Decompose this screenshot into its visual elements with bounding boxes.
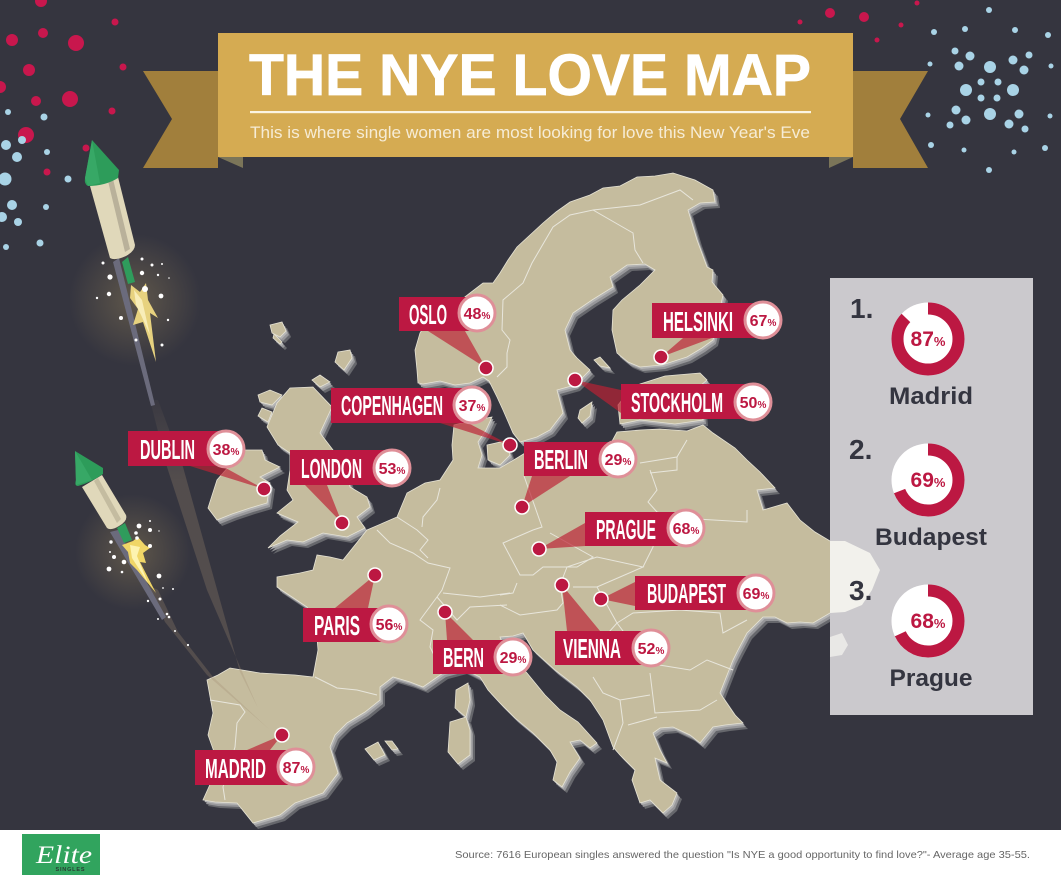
label: Oslo: OSLO	[409, 299, 447, 330]
label: Copenhagen: COPENHAGEN	[341, 390, 443, 421]
rank 2: Budapest: 2.	[849, 434, 872, 465]
label: Bern: BERN	[443, 642, 484, 673]
label: Copenhagen: 37%	[459, 398, 485, 415]
source note: Source: 7616 European singles answered the question "Is NYE a good opportunity to find love?"- Average age 35-55.	[455, 849, 1030, 861]
label: Prague: PRAGUE	[596, 514, 656, 545]
label: Paris: 56%	[376, 617, 402, 634]
rank 1: Madrid: 1.	[850, 293, 873, 324]
label: Vienna: 52%	[638, 641, 664, 658]
label: Madrid: MADRID	[205, 753, 266, 784]
label: Berlin: 29%	[605, 452, 631, 469]
label: Budapest	[635, 575, 774, 611]
country borders	[210, 190, 747, 800]
label: Madrid: 87%	[283, 760, 309, 777]
label: Bern: 29%	[500, 650, 526, 667]
label: London: LONDON	[301, 453, 362, 484]
label: Helsinki: HELSINKI	[663, 306, 733, 337]
rank 1: Madrid	[850, 293, 973, 410]
title: THE NYE LOVE MAP	[249, 43, 811, 108]
rank 1: Madrid: Madrid	[889, 383, 973, 410]
banner right ribbon tail	[853, 71, 928, 168]
label: Budapest: BUDAPEST	[647, 578, 726, 609]
label: Stockholm	[621, 384, 771, 420]
rank 2: Budapest: Budapest	[875, 524, 987, 551]
map of Europe	[203, 173, 885, 829]
label: Bern	[433, 639, 531, 675]
label: Stockholm: STOCKHOLM	[631, 387, 723, 418]
fireworks: blue burst right	[926, 7, 1054, 173]
rocket 2	[75, 451, 191, 646]
rocket 1	[69, 140, 201, 406]
fireworks: red burst top left	[0, 0, 126, 176]
label: Berlin: BERLIN	[534, 444, 588, 475]
label: Vienna: VIENNA	[563, 633, 621, 664]
label: London: 53%	[379, 461, 405, 478]
label: Paris: PARIS	[314, 610, 360, 641]
rank 3: Prague	[849, 575, 972, 692]
footer	[0, 830, 1061, 879]
label: Budapest: 69%	[743, 586, 769, 603]
rank 1: Madrid: 87%	[911, 328, 946, 351]
rank 3: Prague: 68%	[911, 610, 946, 633]
rank 3: Prague: 3.	[849, 575, 872, 606]
rank 2: Budapest: 69%	[911, 469, 946, 492]
subtitle: This is where single women are most looking for love this New Year's Eve	[250, 124, 810, 142]
rocket trails	[148, 400, 270, 730]
logo: Elite Singles: SINGLES	[56, 867, 85, 873]
city pins	[257, 350, 668, 742]
label: Stockholm: 50%	[740, 395, 766, 412]
label: Helsinki: 67%	[750, 313, 776, 330]
label: Dublin: DUBLIN	[140, 434, 195, 465]
label: Dublin: 38%	[213, 442, 239, 459]
banner left ribbon tail	[143, 71, 218, 168]
logo: Elite Singles: Elite	[35, 842, 92, 869]
logo: Elite Singles	[22, 834, 100, 875]
label: Copenhagen	[331, 387, 490, 423]
rank 3: Prague: Prague	[890, 665, 972, 692]
label: Prague: 68%	[673, 521, 699, 538]
rank 2: Budapest	[849, 434, 987, 551]
label: Oslo: 48%	[464, 306, 490, 323]
connector wedges	[190, 331, 712, 750]
fireworks: red burst top right	[798, 0, 920, 42]
fireworks: blue burst left	[0, 109, 72, 250]
banner	[143, 33, 928, 168]
label: Paris	[303, 606, 407, 642]
panel: top three ranking	[830, 278, 1033, 715]
